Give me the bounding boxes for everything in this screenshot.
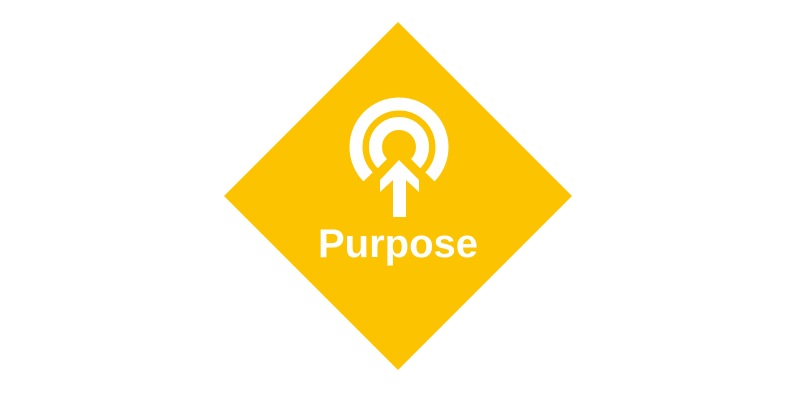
panel: yellow diamond xyxy=(224,22,572,370)
icon: target with arrow xyxy=(356,104,442,217)
title: Purpose: Purpose xyxy=(318,222,478,266)
